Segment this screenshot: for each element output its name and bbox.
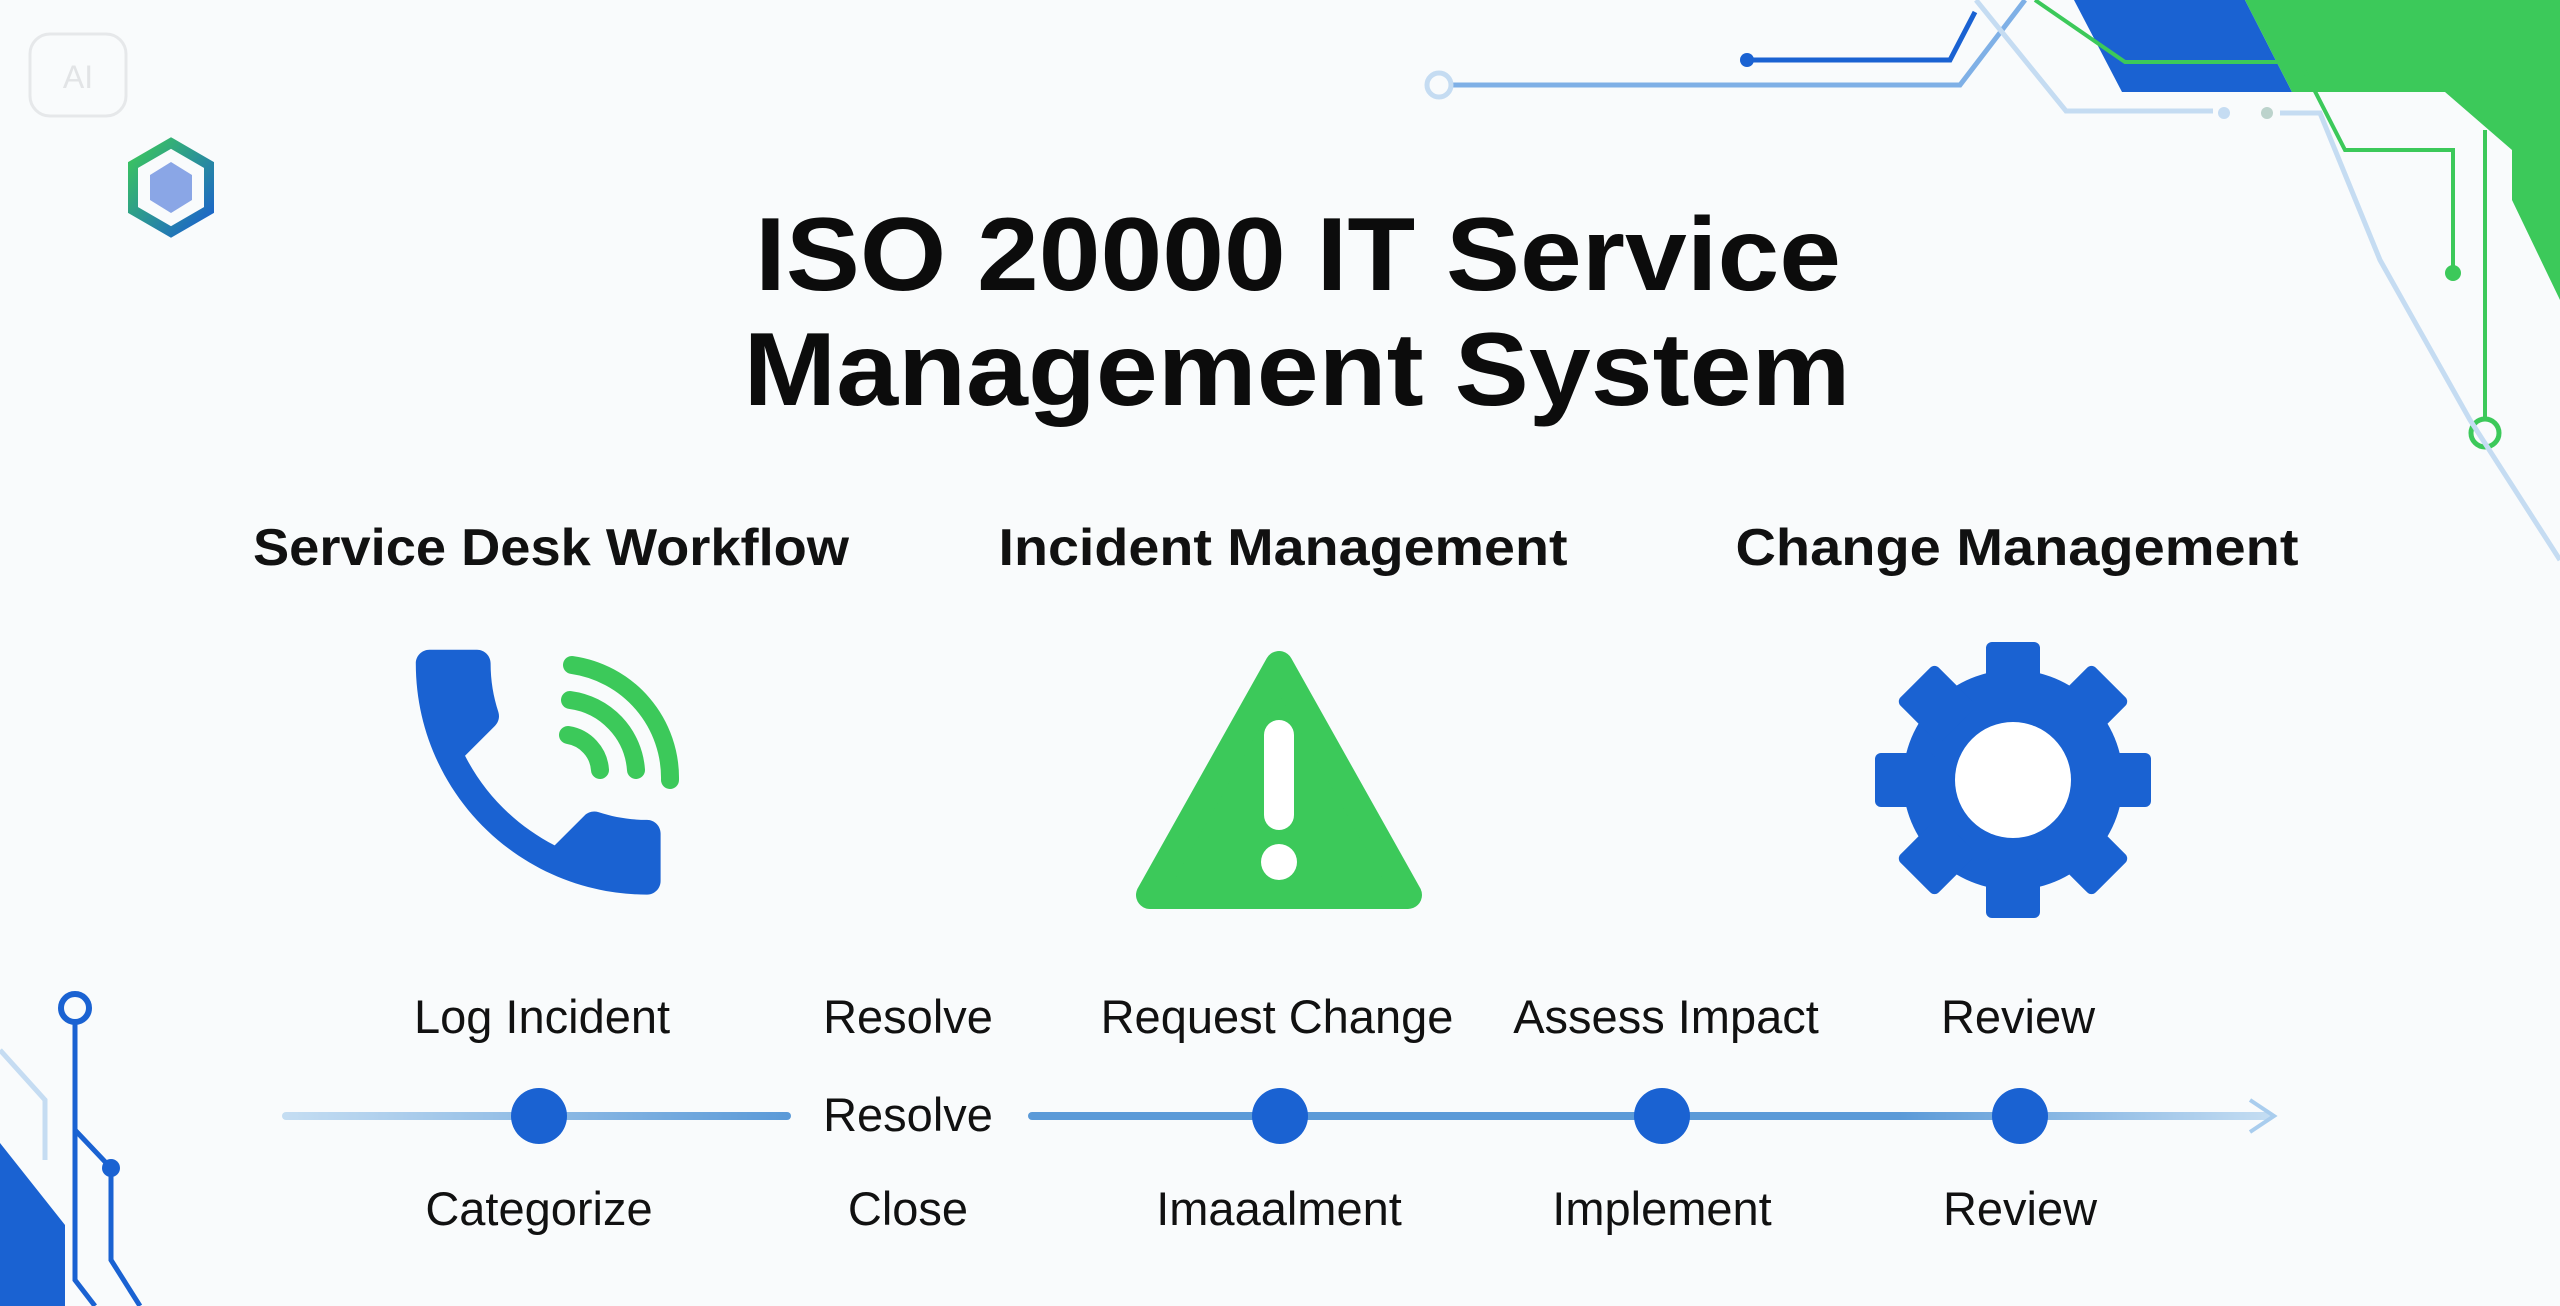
icon: gear — [1875, 642, 2151, 918]
title — [744, 197, 1850, 428]
decoration: top-right circuit corner — [1427, 0, 2560, 560]
labels: bottom row: Categorize — [425, 1182, 653, 1235]
labels: bottom row: Review — [1943, 1182, 2098, 1235]
icon: warning triangle — [1150, 665, 1408, 895]
labels: bottom row: Close — [848, 1182, 968, 1235]
labels: bottom row: Implement — [1552, 1182, 1772, 1235]
labels: top row: Resolve — [823, 990, 993, 1043]
labels: top row — [414, 990, 2096, 1043]
timeline: Resolve — [823, 1088, 993, 1141]
heading: Service Desk Workflow: Service Desk Workflow — [253, 519, 850, 577]
timeline — [286, 1088, 2274, 1144]
labels: top row: Request Change — [1101, 990, 1453, 1043]
icon: phone — [416, 650, 670, 895]
labels: bottom row: Imaaalment — [1156, 1182, 1402, 1235]
title: Management System — [744, 312, 1850, 428]
heading: Incident Management: Incident Management — [998, 519, 1568, 577]
decoration: bottom-left circuit corner — [0, 994, 140, 1306]
badge: AI — [30, 34, 126, 116]
labels: bottom row — [425, 1182, 2098, 1235]
icon: logo hexagon — [133, 143, 209, 232]
heading: Change Management: Change Management — [1736, 519, 2298, 577]
labels: top row: Assess Impact — [1513, 990, 1819, 1043]
labels: top row: Review — [1941, 990, 2096, 1043]
labels: top row: Log Incident — [414, 990, 670, 1043]
title: ISO 20000 IT Service — [755, 197, 1841, 313]
badge: AI: AI — [63, 59, 93, 95]
